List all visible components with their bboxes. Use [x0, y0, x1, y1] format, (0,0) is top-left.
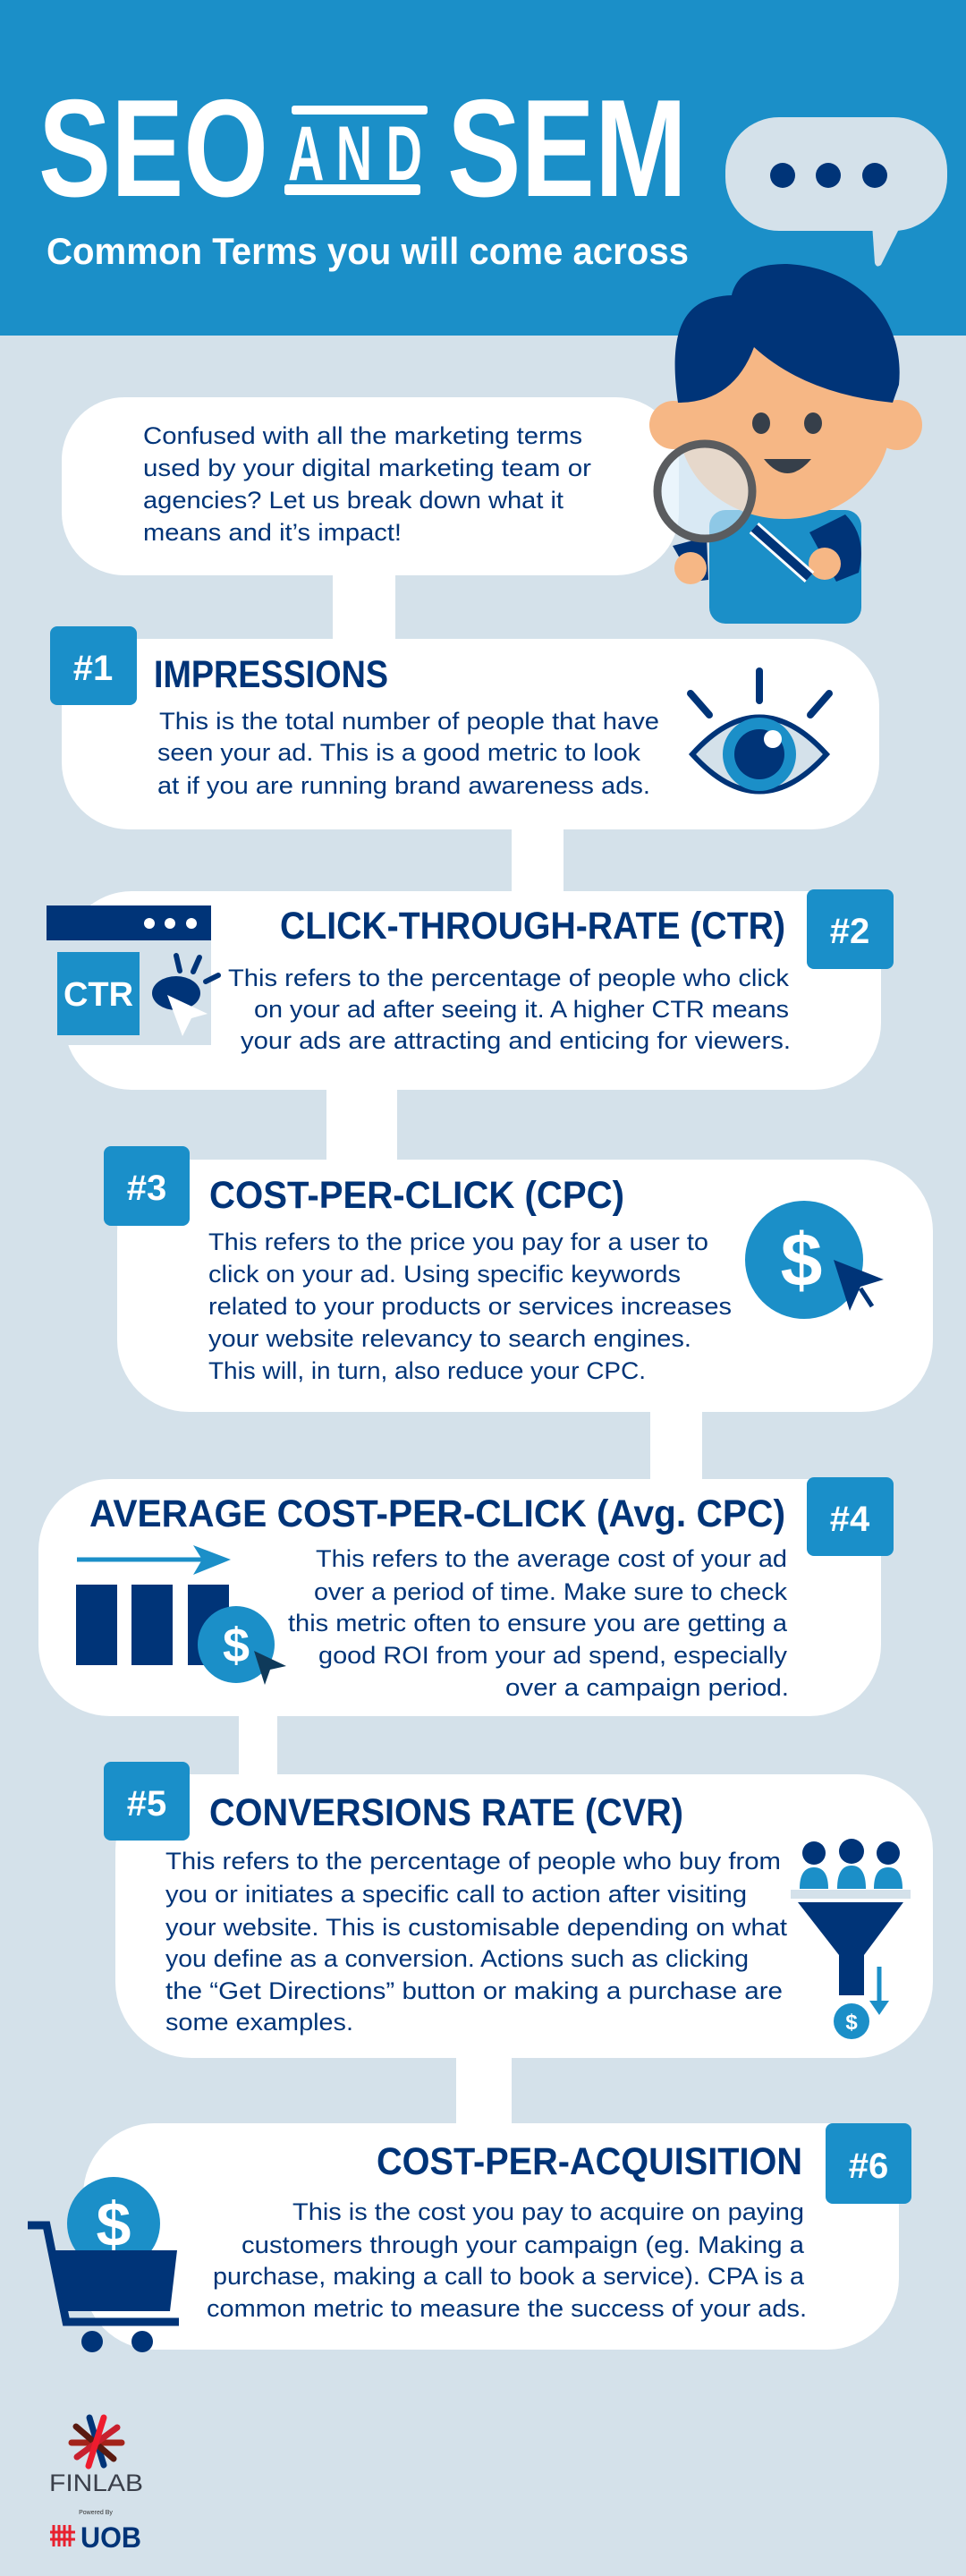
icon: bars with dollar: [76, 1545, 286, 1685]
icon: eye: [691, 671, 829, 791]
panel: #6 cpa: [28, 2123, 911, 2352]
heading: COST-PER-ACQUISITION: [377, 2140, 802, 2183]
panel: #4 avg cpc: [38, 1477, 894, 1716]
text: customers through your campaign (eg. Making a: [242, 2232, 805, 2258]
panel: #5 cvr: [104, 1762, 933, 2058]
text: your website. This is customisable depending on what: [165, 1914, 788, 1941]
intro bubble: [62, 397, 679, 575]
text: [288, 1545, 789, 1701]
badge #5: #5: [127, 1784, 166, 1824]
heading: AVERAGE COST-PER-CLICK (Avg. CPC): [89, 1492, 785, 1535]
text: at if you are running brand awareness ads.: [157, 772, 650, 799]
icon: funnel: $: [845, 2011, 858, 2035]
connector: #2 to #3: [326, 1083, 397, 1165]
badge #6: [826, 2123, 911, 2204]
logo: finlab powered by uob: [49, 2418, 143, 2554]
text: you define as a conversion. Actions such as clicking: [165, 1945, 749, 1972]
badge #3: [104, 1146, 190, 1226]
text: This will, in turn, also reduce your CPC.: [208, 1357, 646, 1384]
badge #1: [50, 626, 137, 705]
heading: CLICK-THROUGH-RATE (CTR): [280, 905, 785, 948]
heading: COST-PER-CLICK (CPC): [209, 1174, 624, 1217]
icon: cart with dollar: [28, 2177, 179, 2352]
badge #6: #6: [849, 2147, 888, 2186]
title: [38, 71, 687, 225]
logo: finlab powered by uob: Powered By: [79, 2510, 113, 2516]
intro bubble: Confused with all the marketing terms: [143, 422, 582, 449]
character with magnifier: [649, 264, 922, 624]
connector: #5 to #6: [456, 2049, 512, 2131]
title: A N D: [288, 111, 422, 197]
intro bubble: means and it’s impact!: [143, 519, 402, 546]
badge #2: [807, 889, 894, 969]
heading: CONVERSIONS RATE (CVR): [209, 1791, 683, 1834]
connector: intro to #1: [333, 564, 395, 653]
icon: funnel: [791, 1839, 911, 2039]
panel: #2 ctr: [47, 889, 894, 1090]
icon: bars with dollar: $: [223, 1619, 250, 1672]
text: common metric to measure the success of your ads.: [207, 2295, 807, 2322]
text: This refers to the percentage of people who click: [228, 965, 790, 991]
text: your ads are attracting and enticing for viewers.: [241, 1027, 791, 1054]
text: This is the cost you pay to acquire on paying: [292, 2198, 804, 2225]
heading: IMPRESSIONS: [154, 653, 388, 696]
text: your website relevancy to search engines.: [208, 1325, 691, 1352]
text: click on your ad. Using specific keywords: [208, 1261, 681, 1288]
text: purchase, making a call to book a service). CPA is a: [213, 2263, 805, 2290]
text: [157, 708, 659, 799]
text: seen your ad. This is a good metric to look: [157, 739, 641, 766]
badge #4: #4: [830, 1500, 870, 1539]
title: SEO: [38, 71, 268, 225]
panel: #3 cpc: [104, 1146, 933, 1412]
icon: cart with dollar: $: [97, 2189, 131, 2259]
icon: dollar cursor: [745, 1201, 884, 1319]
icon: speech bubble: [725, 117, 947, 267]
text: [228, 965, 791, 1054]
connector: #3 to #4: [650, 1405, 702, 1485]
header band: [0, 0, 966, 336]
intro bubble: used by your digital marketing team or: [143, 455, 591, 481]
text: [207, 2198, 807, 2322]
connector: #4 to #5: [239, 1709, 277, 1781]
badge #3: #3: [127, 1169, 166, 1208]
badge #1: #1: [73, 649, 113, 688]
icon: ctr browser: [47, 905, 218, 1045]
text: over a campaign period.: [505, 1674, 789, 1701]
text: good ROI from your ad spend, especially: [318, 1642, 788, 1669]
text: this metric often to ensure you are getting a: [288, 1610, 788, 1637]
icon: dollar cursor: $: [781, 1218, 822, 1302]
logo: finlab powered by uob: FINLAB: [49, 2470, 143, 2496]
text: on your ad after seeing it. A higher CTR means: [254, 996, 789, 1023]
subtitle: Common Terms you will come across: [47, 230, 689, 272]
text: [165, 1848, 788, 2036]
icon: ctr browser: CTR: [64, 976, 133, 1014]
text: over a period of time. Make sure to check: [314, 1578, 788, 1605]
badge #5: [104, 1762, 190, 1841]
panel: #1 impressions: [50, 626, 879, 829]
logo: finlab powered by uob: UOB: [80, 2521, 141, 2554]
text: related to your products or services increases: [208, 1293, 732, 1320]
text: This refers to the percentage of people who buy from: [165, 1848, 781, 1875]
title: SEM: [447, 71, 687, 225]
badge #2: #2: [830, 912, 869, 951]
text: you or initiates a specific call to action after visiting: [165, 1881, 747, 1908]
text: This refers to the average cost of your ad: [316, 1545, 787, 1572]
text: This refers to the price you pay for a user to: [208, 1228, 708, 1255]
connector: #1 to #2: [512, 823, 564, 897]
intro bubble: agencies? Let us break down what it: [143, 487, 564, 514]
badge #4: [807, 1477, 894, 1556]
text: the “Get Directions” button or making a purchase are: [165, 1977, 783, 2004]
text: some examples.: [165, 2009, 353, 2036]
text: This is the total number of people that have: [159, 708, 659, 735]
text: [208, 1228, 732, 1384]
